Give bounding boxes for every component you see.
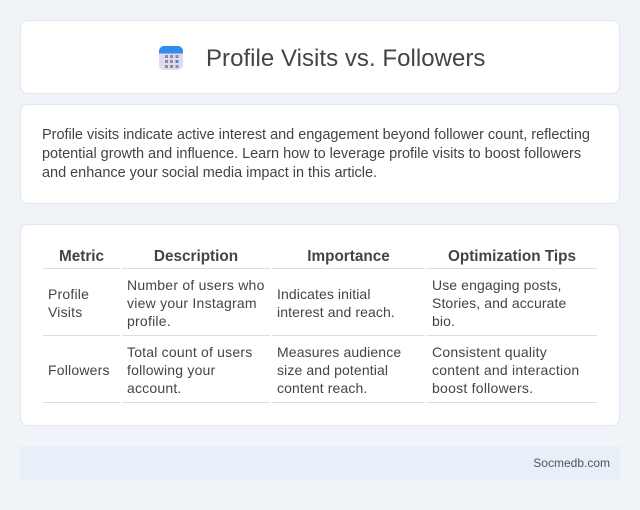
- row 1: metric: Profile: [48, 286, 89, 302]
- row 1: metric: Visits: [48, 304, 82, 320]
- row 1: tips: Stories, and accurate: [432, 295, 566, 311]
- title card: [20, 20, 620, 94]
- icon: calendar: [159, 46, 183, 70]
- row 1: description: view your Instagram: [127, 295, 257, 311]
- title: Profile Visits vs. Followers: [206, 45, 485, 72]
- row 1: tips: Use engaging posts,: [432, 277, 562, 293]
- row 1: importance: [277, 286, 395, 320]
- footer text: Socmedb.com: [533, 456, 610, 470]
- header: optimization tips: Optimization Tips: [448, 248, 576, 265]
- intro text: Profile visits indicate active interest and engagement beyond follower count, reflecting: [42, 127, 590, 143]
- row 2: tips: content and interaction: [432, 362, 579, 378]
- row 1: metric: [48, 286, 89, 320]
- row 1: tips: bio.: [432, 313, 455, 329]
- row 1: description: [127, 277, 265, 329]
- row 2: description: account.: [127, 380, 182, 396]
- row 2: tips: Consistent quality: [432, 344, 547, 360]
- intro text: potential growth and influence. Learn how to leverage profile visits to boost followers: [42, 146, 581, 162]
- table card: [20, 224, 620, 426]
- row 2: importance: [277, 344, 401, 396]
- row 2: importance: Measures audience: [277, 344, 401, 360]
- header: importance: Importance: [307, 248, 390, 265]
- row 1: importance: interest and reach.: [277, 304, 395, 320]
- header: description: Description: [154, 248, 238, 265]
- intro text: and enhance your social media impact in this article.: [42, 165, 377, 181]
- row 1: description: profile.: [127, 313, 171, 329]
- row 2: metric: Followers: [48, 362, 110, 378]
- row 2: tips: [432, 344, 579, 396]
- intro card: [20, 104, 620, 204]
- row 2: tips: boost followers.: [432, 380, 533, 396]
- row 1: tips: [432, 277, 566, 329]
- row 2: description: following your: [127, 362, 215, 378]
- row 2: description: Total count of users: [127, 344, 252, 360]
- header: metric: Metric: [59, 248, 104, 265]
- row 2: description: [127, 344, 252, 396]
- row 1: importance: Indicates initial: [277, 286, 371, 302]
- row 2: importance: size and potential: [277, 362, 388, 378]
- row 1: description: Number of users who: [127, 277, 265, 293]
- intro text: [42, 127, 590, 181]
- row 2: importance: content reach.: [277, 380, 367, 396]
- footer bar: [20, 446, 620, 480]
